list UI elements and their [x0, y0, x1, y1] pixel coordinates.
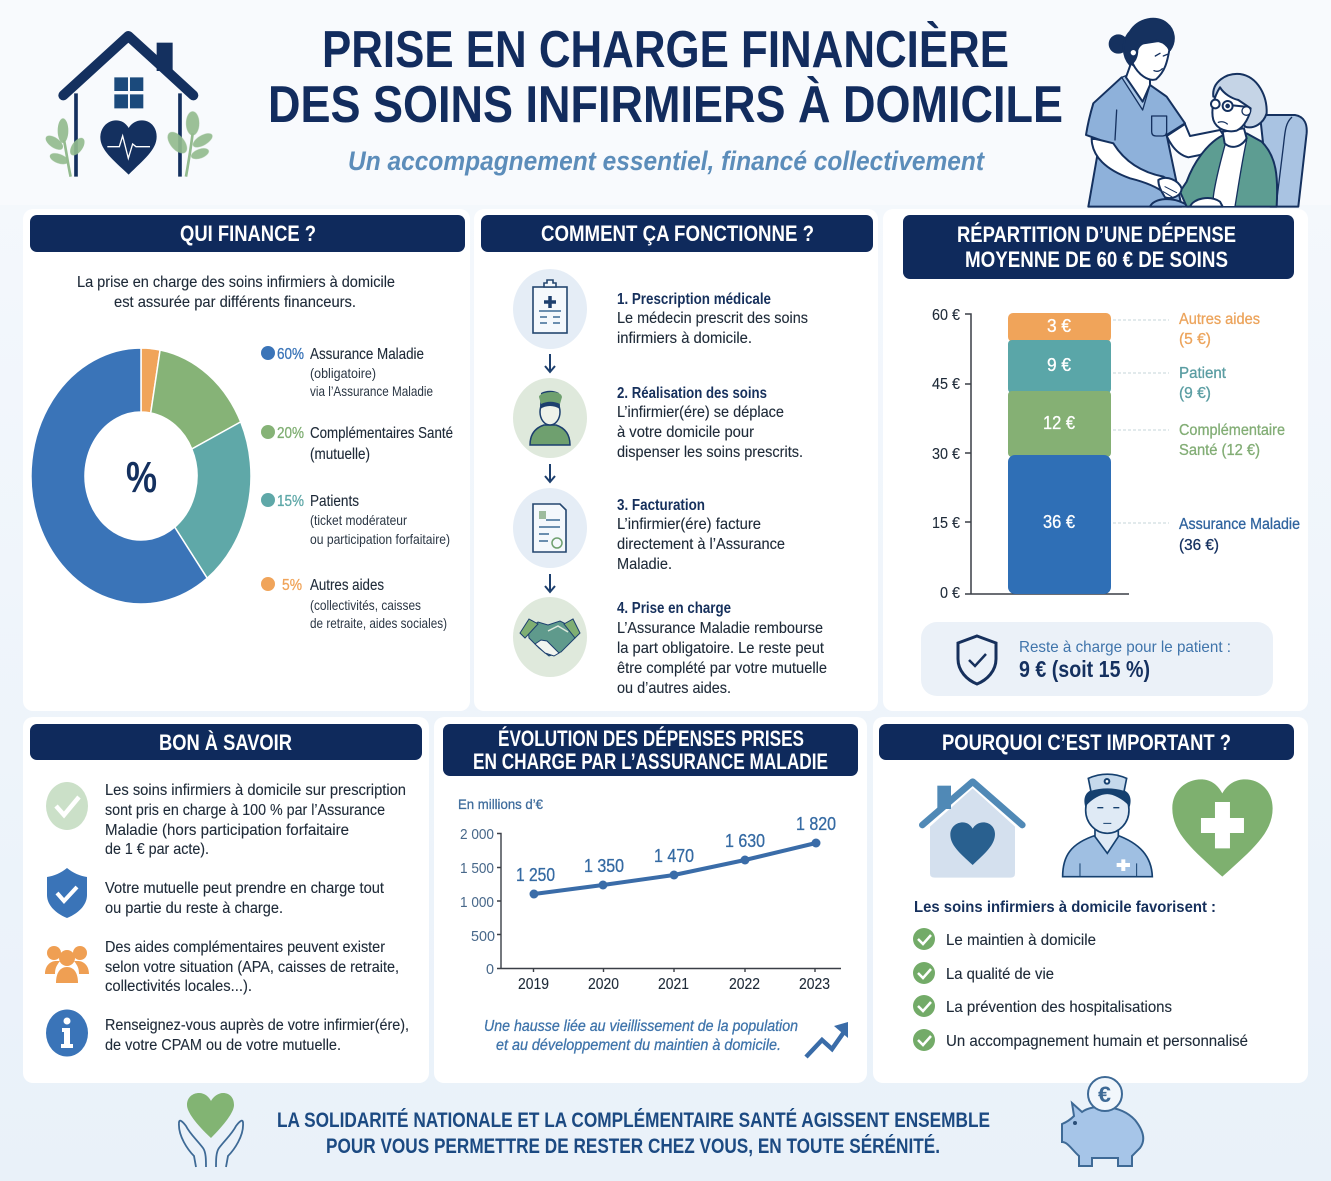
legend: autres aides: Autres aides	[310, 577, 384, 594]
stacked bar chart: 30 €	[932, 446, 960, 463]
icon: house logo	[43, 36, 215, 177]
heading: évolution: ÉVOLUTION DES DÉPENSES PRISES	[498, 726, 804, 751]
icon: heart with cross	[1172, 779, 1273, 877]
line chart: 1 820	[796, 814, 836, 834]
step 2 text: dispenser les soins prescrits.	[617, 444, 803, 461]
step 3 text: Maladie.	[617, 556, 672, 573]
donut chart: %	[126, 453, 157, 502]
step 4 text	[617, 600, 827, 697]
item 3: selon votre situation (APA, caisses de retraite,	[105, 959, 399, 976]
heading: pourquoi: POURQUOI C’EST IMPORTANT ?	[942, 730, 1231, 755]
step 3 text: 3. Facturation	[617, 497, 705, 514]
closing message: LA SOLIDARITÉ NATIONALE ET LA COMPLÉMENTAIRE SANTÉ AGISSENT ENSEMBLE	[277, 1109, 990, 1132]
panel: qui finance	[23, 209, 470, 711]
step 1 text: infirmiers à domicile.	[617, 330, 752, 347]
step 2 text	[617, 385, 803, 461]
step 2 text: 2. Réalisation des soins	[617, 385, 767, 402]
arrow 1	[545, 354, 555, 372]
benefit 2	[913, 962, 1054, 984]
item 4	[105, 1017, 409, 1054]
item 2: Votre mutuelle peut prendre en charge tout	[105, 880, 385, 897]
icon: piggy bank with euro: €	[1098, 1082, 1111, 1107]
chart note: et au développement du maintien à domicile.	[496, 1037, 781, 1054]
line chart: 2019	[518, 976, 549, 993]
stacked bar chart: Patient	[1179, 365, 1227, 382]
title	[268, 21, 1063, 134]
legend: patients: (ticket modérateur	[310, 512, 407, 528]
legend: autres aides	[261, 577, 447, 631]
panel: comment ça fonctionne	[474, 209, 878, 711]
line chart: 500	[471, 928, 495, 945]
legend: patients: 15%	[277, 493, 304, 510]
step 4 text: L’Assurance Maladie rembourse	[617, 620, 823, 637]
step 4 text: la part obligatoire. Le reste peut	[617, 640, 825, 657]
arrow 3	[545, 574, 555, 592]
stacked bar chart: Complémentaire	[1179, 422, 1285, 439]
stacked bar chart	[932, 307, 1300, 602]
stacked bar chart: 3 €	[1047, 316, 1071, 336]
stacked bar chart: 9 €	[1047, 355, 1071, 375]
line chart: 1 630	[725, 831, 765, 851]
item 4: de votre CPAM ou de votre mutuelle.	[105, 1037, 341, 1054]
step 4 text: 4. Prise en charge	[617, 600, 731, 617]
stacked bar chart: 45 €	[932, 376, 960, 393]
benefit 4: Un accompagnement humain et personnalisé	[946, 1033, 1248, 1050]
benefit 3: La prévention des hospitalisations	[946, 999, 1172, 1016]
panel: pourquoi	[873, 717, 1308, 1083]
step 1 text: 1. Prescription médicale	[617, 291, 771, 308]
step 3 text: directement à l’Assurance	[617, 536, 785, 553]
benefit 3	[913, 995, 1172, 1017]
icon: clipboard prescription	[513, 269, 587, 349]
stacked bar chart: 36 €	[1043, 512, 1075, 532]
line chart: 2020	[588, 976, 619, 993]
intro text	[77, 274, 395, 311]
callout: reste à charge: 9 € (soit 15 %)	[1019, 656, 1150, 682]
item 2	[105, 880, 385, 917]
heading: qui finance: QUI FINANCE ?	[180, 221, 316, 246]
legend: assurance maladie: via l’Assurance Maladie	[310, 383, 433, 399]
panel: évolution	[434, 717, 867, 1083]
step 1 text: Le médecin prescrit des soins	[617, 310, 808, 327]
stacked bar chart: 0 €	[940, 585, 960, 602]
stacked bar chart: Assurance Maladie	[1179, 516, 1300, 533]
icon: info	[46, 1010, 88, 1056]
legend: complémentaires santé: 20%	[277, 425, 304, 442]
step 2 text: L’infirmier(ére) se déplace	[617, 404, 784, 421]
step 4 text: ou d’autres aides.	[617, 680, 731, 697]
line chart: 0	[486, 961, 494, 978]
item 3: Des aides complémentaires peuvent exister	[105, 939, 386, 956]
item 1	[105, 782, 406, 858]
donut chart	[31, 348, 251, 604]
legend: patients	[261, 493, 450, 547]
line chart: 1 250	[516, 865, 555, 885]
icon: nurse	[513, 378, 587, 458]
stacked bar chart: 60 €	[932, 307, 960, 324]
benefit 2: La qualité de vie	[946, 966, 1054, 983]
heading: bon à savoir	[30, 724, 422, 760]
heading: qui finance	[30, 215, 465, 252]
icon: invoice	[513, 488, 587, 568]
legend: assurance maladie: 60%	[277, 346, 304, 363]
benefit 4	[913, 1029, 1248, 1051]
icon: piggy bank with euro	[1062, 1077, 1143, 1166]
line chart: 1 470	[654, 846, 694, 866]
step 3 text: L’infirmier(ére) facture	[617, 516, 761, 533]
legend: assurance maladie: Assurance Maladie	[310, 346, 424, 363]
title: PRISE EN CHARGE FINANCIÈRE	[322, 21, 1009, 79]
callout: reste à charge	[921, 622, 1273, 696]
line chart: 2023	[799, 976, 830, 993]
panel: bon à savoir	[23, 717, 429, 1083]
chart note	[484, 1018, 798, 1054]
legend: autres aides: (collectivités, caisses	[310, 597, 421, 613]
legend: complémentaires santé	[261, 425, 453, 463]
line chart: 2 000	[460, 826, 494, 843]
heading: comment ça fonctionne: COMMENT ÇA FONCTIONNE ?	[541, 221, 814, 246]
line chart: 2021	[658, 976, 689, 993]
intro text: La prise en charge des soins infirmiers à domicile	[77, 274, 395, 291]
heading: évolution: EN CHARGE PAR L’ASSURANCE MALADIE	[473, 749, 828, 774]
legend: patients: ou participation forfaitaire)	[310, 531, 450, 547]
legend: complémentaires santé: Complémentaires Santé	[310, 425, 453, 442]
item 2: ou partie du reste à charge.	[105, 900, 283, 917]
stacked bar chart: (36 €)	[1179, 537, 1219, 554]
list heading: Les soins infirmiers à domicile favorisent :	[914, 899, 1216, 916]
arrow 2	[545, 464, 555, 482]
line chart: 1 500	[460, 860, 494, 877]
heading: répartition: RÉPARTITION D’UNE DÉPENSE	[957, 222, 1236, 247]
icon: people	[45, 946, 89, 983]
heading: évolution	[443, 724, 858, 776]
benefit 1	[913, 928, 1096, 950]
step 3 text	[617, 497, 785, 573]
closing message	[277, 1109, 990, 1158]
legend: complémentaires santé: (mutuelle)	[310, 446, 370, 463]
stacked bar chart: Autres aides	[1179, 311, 1260, 328]
heading: comment ça fonctionne	[481, 215, 873, 252]
stacked bar chart: 15 €	[932, 515, 960, 532]
icon: hands with heart	[179, 1093, 243, 1167]
intro text: est assurée par différents financeurs.	[114, 294, 356, 311]
stacked bar chart: 12 €	[1043, 413, 1075, 433]
line chart	[458, 796, 841, 993]
stacked bar chart: (9 €)	[1179, 385, 1211, 402]
legend: patients: Patients	[310, 493, 359, 510]
callout: reste à charge: Reste à charge pour le patient :	[1019, 639, 1231, 656]
item 1: Maladie (hors participation forfaitaire	[105, 822, 349, 839]
chart note: Une hausse liée au vieillissement de la population	[484, 1018, 798, 1035]
heading: pourquoi	[879, 724, 1294, 760]
stacked bar chart: (5 €)	[1179, 331, 1211, 348]
illustration: nurse and patient	[1086, 19, 1307, 207]
heading: répartition: MOYENNE DE 60 € DE SOINS	[965, 247, 1228, 272]
heading: répartition	[903, 215, 1294, 279]
line chart: 1 000	[460, 894, 494, 911]
item 1: de 1 € par acte).	[105, 841, 209, 858]
legend: autres aides: 5%	[282, 577, 302, 594]
subtitle: Un accompagnement essentiel, financé collectivement	[348, 146, 985, 176]
benefit 1: Le maintien à domicile	[946, 932, 1096, 949]
legend: assurance maladie: (obligatoire)	[310, 365, 376, 381]
item 4: Renseignez-vous auprès de votre infirmier(ére),	[105, 1017, 409, 1034]
line chart: 1 350	[584, 856, 624, 876]
icon: nurse bust	[1063, 774, 1152, 877]
line chart: 2022	[729, 976, 760, 993]
icon: handshake	[513, 597, 587, 677]
stacked bar chart: Santé (12 €)	[1179, 442, 1260, 459]
icon: house with heart	[922, 782, 1022, 878]
panel: répartition	[883, 209, 1308, 711]
icon: shield	[47, 868, 87, 918]
step 4 text: être complété par votre mutuelle	[617, 660, 827, 677]
item 3: collectivités locales...).	[105, 978, 252, 995]
legend: assurance maladie	[261, 346, 433, 399]
step 2 text: à votre domicile pour	[617, 424, 755, 441]
heading: bon à savoir: BON À SAVOIR	[159, 730, 292, 755]
item 1: sont pris en charge à 100 % par l’Assurance	[105, 802, 385, 819]
title: DES SOINS INFIRMIERS À DOMICILE	[268, 76, 1063, 134]
icon: check circle	[46, 782, 88, 830]
step 1 text	[617, 291, 808, 347]
item 1: Les soins infirmiers à domicile sur prescription	[105, 782, 406, 799]
line chart: En millions d’€	[458, 796, 543, 812]
closing message: POUR VOUS PERMETTRE DE RESTER CHEZ VOUS, EN TOUTE SÉRÉNITÉ.	[326, 1135, 940, 1158]
legend: autres aides: de retraite, aides sociales)	[310, 615, 447, 631]
icon: trend arrow	[806, 1022, 848, 1057]
item 3	[105, 939, 399, 995]
